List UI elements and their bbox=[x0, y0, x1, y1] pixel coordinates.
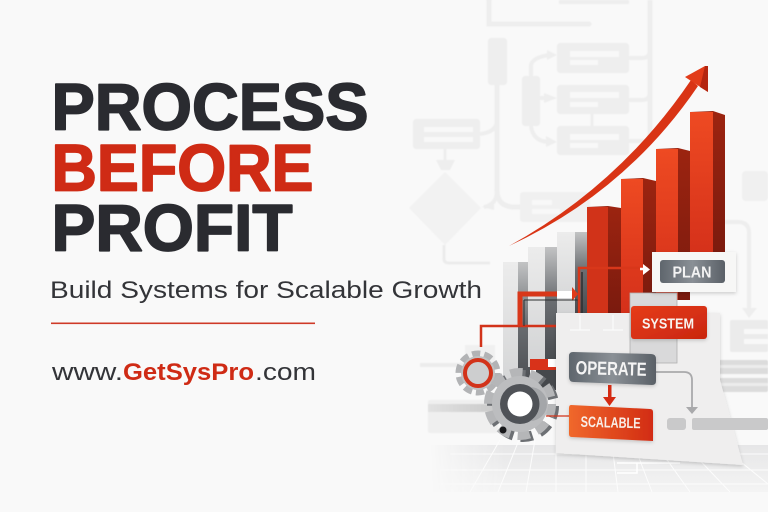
website url: GetSysPro bbox=[123, 359, 254, 386]
background flowchart bbox=[409, 0, 768, 392]
gray flow arrow bbox=[656, 372, 698, 414]
website url: www. bbox=[51, 359, 123, 386]
scalable button bbox=[569, 405, 653, 441]
gray panel left base bbox=[428, 400, 498, 433]
large gear bbox=[489, 373, 554, 437]
main process panel bbox=[556, 293, 743, 465]
growth arrow bbox=[509, 66, 708, 246]
red bar chart bbox=[587, 111, 725, 315]
red connector lines bbox=[481, 264, 650, 390]
divider rule bbox=[51, 322, 315, 324]
scalable button: SCALABLE bbox=[580, 414, 641, 432]
red down arrow bbox=[603, 385, 616, 406]
operate button: OPERATE bbox=[575, 358, 647, 381]
system button bbox=[631, 306, 707, 339]
gray bar chart bbox=[503, 232, 587, 397]
gear connector bbox=[546, 415, 569, 417]
title bbox=[52, 70, 368, 264]
title: PROCESS bbox=[52, 70, 368, 144]
operate button bbox=[569, 352, 656, 385]
website url bbox=[51, 359, 316, 386]
subtitle: Build Systems for Scalable Growth bbox=[50, 277, 482, 304]
small gear bbox=[459, 354, 497, 392]
system button: SYSTEM bbox=[642, 316, 694, 332]
gray status bars bbox=[667, 418, 768, 430]
floor grid bbox=[462, 445, 768, 482]
title: PROFIT bbox=[52, 190, 292, 264]
website url: .com bbox=[255, 359, 316, 386]
plan card bbox=[652, 252, 736, 292]
plan button: PLAN bbox=[672, 264, 712, 282]
title: BEFORE bbox=[52, 130, 314, 204]
